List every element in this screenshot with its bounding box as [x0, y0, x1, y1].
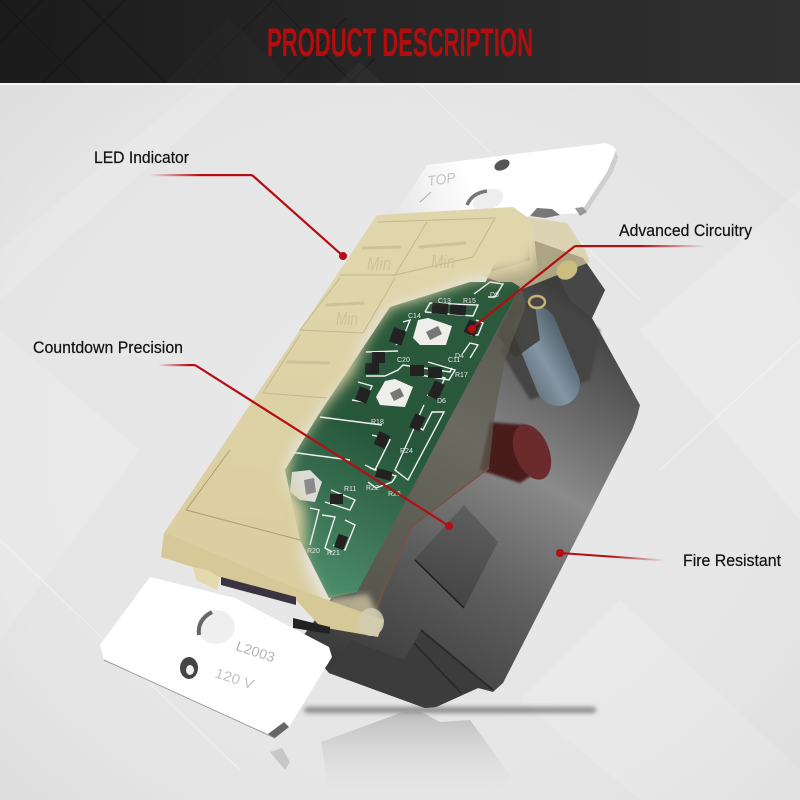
silkscreen labels: R11	[344, 486, 356, 493]
button labels: Min	[431, 252, 455, 272]
top cover plate	[395, 143, 618, 230]
LED switch 2	[376, 379, 413, 407]
translucent mid-shell	[340, 285, 526, 625]
silkscreen labels: D8	[490, 292, 499, 299]
button labels	[336, 252, 455, 329]
floor shadow and reflection	[270, 707, 596, 800]
silkscreen labels: C20	[397, 357, 410, 364]
silkscreen labels: D6	[437, 398, 446, 405]
silkscreen labels: R26	[388, 491, 401, 498]
silkscreen labels: C13	[438, 298, 451, 305]
ivory switch face	[161, 207, 538, 637]
beige fade over lower shell	[330, 594, 378, 632]
switch button seams	[263, 218, 495, 398]
silkscreen labels: R15	[463, 298, 476, 305]
LED switch 1	[413, 318, 452, 345]
button ridges	[288, 243, 465, 363]
callout: LED Indicator: LED Indicator	[94, 148, 189, 167]
header banner	[0, 0, 800, 85]
title: PRODUCT DESCRIPTION	[267, 21, 533, 65]
slot	[221, 577, 296, 605]
silkscreen labels: C14	[408, 313, 421, 320]
callout: LED Indicator	[94, 148, 347, 260]
silkscreen labels: R22	[366, 485, 379, 492]
silkscreen labels: R18	[371, 419, 384, 426]
green circuit board	[285, 282, 520, 598]
clip tab	[193, 567, 220, 590]
fire resistant housing	[300, 232, 640, 708]
callout: Fire Resistant	[556, 549, 781, 570]
silkscreen labels: C11	[448, 357, 460, 364]
callout: Advanced Circuitry: Advanced Circuitry	[619, 221, 752, 240]
callout: Countdown Precision: Countdown Precision	[33, 338, 183, 357]
button labels: Min	[367, 254, 391, 274]
plate markings: L2003	[234, 638, 277, 665]
blue capacitor	[497, 296, 558, 384]
plate screw holes	[467, 157, 511, 216]
LED switch 3	[290, 470, 322, 502]
red capacitor	[480, 419, 559, 485]
callout: Fire Resistant: Fire Resistant	[683, 551, 781, 570]
silkscreen labels: D4	[455, 353, 464, 360]
rear beige top	[480, 217, 590, 290]
callout: Countdown Precision	[33, 338, 453, 530]
bottom cover plate: 120 V	[213, 665, 257, 692]
silkscreen labels	[307, 292, 499, 557]
mounting post	[553, 256, 581, 284]
silkscreen labels: R21	[327, 550, 340, 557]
plate marking: TOP	[426, 169, 457, 189]
surface-mount chips	[330, 302, 480, 550]
callout: Advanced Circuitry	[468, 221, 752, 333]
countdown block	[375, 468, 498, 610]
bottom cover plate	[100, 577, 332, 738]
button labels: Min	[336, 309, 358, 329]
silkscreen labels: R20	[307, 548, 320, 555]
plate holes	[180, 610, 235, 679]
round post	[358, 608, 384, 636]
silkscreen labels: R24	[400, 448, 413, 455]
lower lip	[161, 533, 384, 637]
silkscreen labels: R17	[455, 372, 468, 379]
